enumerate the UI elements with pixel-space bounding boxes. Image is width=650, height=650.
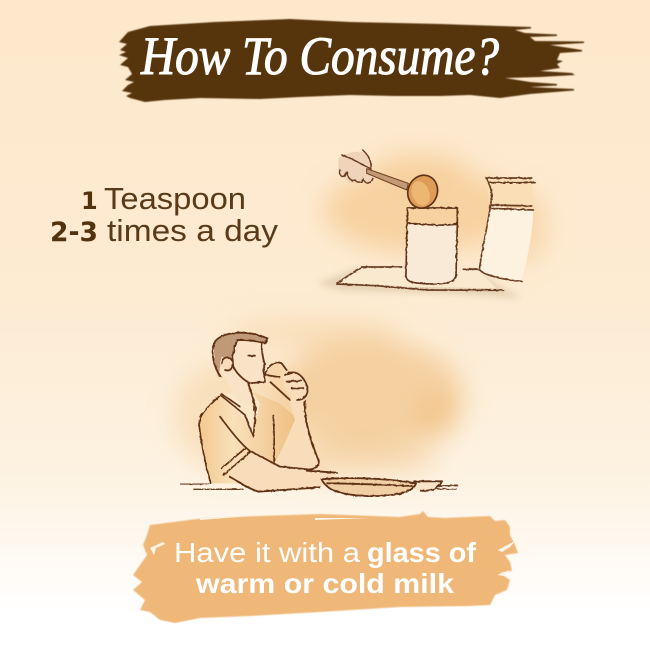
shirt (199, 390, 295, 483)
jar (406, 207, 457, 284)
watercolor wash (323, 152, 547, 263)
line: 2-3 times a day: times a day (107, 213, 279, 248)
line: 1 teaspoon: 1 (81, 187, 98, 215)
line: 1 teaspoon: Teaspoon (104, 181, 246, 216)
illustration: man drinking milk (173, 318, 463, 496)
glass and hand (265, 362, 308, 403)
line 1: Have it with a (174, 537, 360, 568)
brush stroke: callout (133, 511, 518, 623)
line 2: warm or cold milk (195, 568, 454, 599)
brush stroke: title (119, 19, 584, 102)
hand and spoon (338, 150, 442, 212)
dosage text (50, 181, 279, 248)
line: 2-3 times a day: 2-3 (50, 217, 98, 248)
head (213, 332, 267, 410)
callout text (174, 537, 477, 599)
title banner (119, 19, 584, 102)
milk callout (133, 511, 518, 623)
plate and bowl (322, 478, 442, 496)
illustration: spoon, jar and jug on tray (317, 150, 547, 298)
arm (229, 398, 337, 492)
brush nicks (150, 516, 515, 576)
tray (317, 267, 523, 298)
title text: How To Consume? (140, 26, 499, 86)
watercolor wash (173, 318, 463, 477)
table line (180, 484, 458, 489)
jug (479, 178, 535, 281)
line 1: glass of (367, 537, 477, 568)
